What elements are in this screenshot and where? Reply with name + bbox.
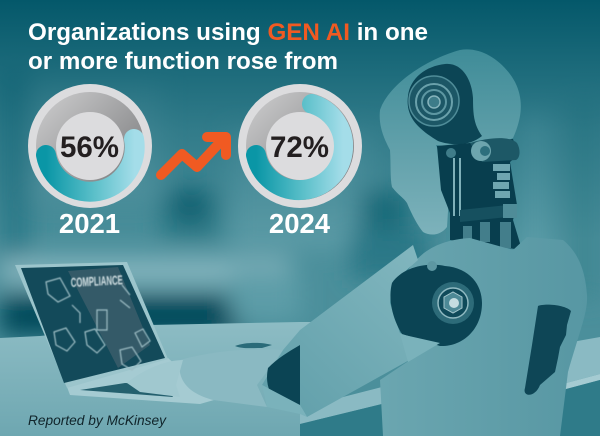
- torso: [380, 237, 587, 436]
- title: Organizations using GEN AI in one: [28, 19, 428, 46]
- growth arrow: [161, 137, 226, 175]
- robot: [127, 49, 587, 436]
- laptop base: [67, 358, 214, 404]
- robot hand: [127, 360, 183, 397]
- value 56%: 56%: [60, 131, 119, 164]
- year 2024: 2024: [269, 208, 331, 239]
- source note: Reported by McKinsey: [28, 412, 167, 428]
- forearm: [179, 349, 283, 407]
- head cavity with spiral ear: [408, 64, 482, 144]
- screen heading: COMPLIANCE: [70, 272, 123, 290]
- wrist opening: [267, 345, 300, 413]
- laptop screen: [21, 265, 165, 383]
- neck: [437, 138, 522, 250]
- shoulder joint: [390, 261, 482, 362]
- donut chart 2024: [238, 84, 362, 208]
- donut chart 2021: [28, 84, 152, 208]
- table right edge: [300, 337, 600, 436]
- torso vent: [525, 305, 571, 395]
- screen icons: [46, 278, 150, 370]
- laptop: [15, 262, 214, 404]
- upper arm: [262, 245, 440, 417]
- head shell: [380, 49, 521, 235]
- year 2021: 2021: [59, 208, 120, 239]
- title line two: or more function rose from: [28, 48, 338, 75]
- laptop lid: [15, 262, 168, 388]
- value 72%: 72%: [270, 131, 329, 164]
- table surface: [0, 322, 315, 436]
